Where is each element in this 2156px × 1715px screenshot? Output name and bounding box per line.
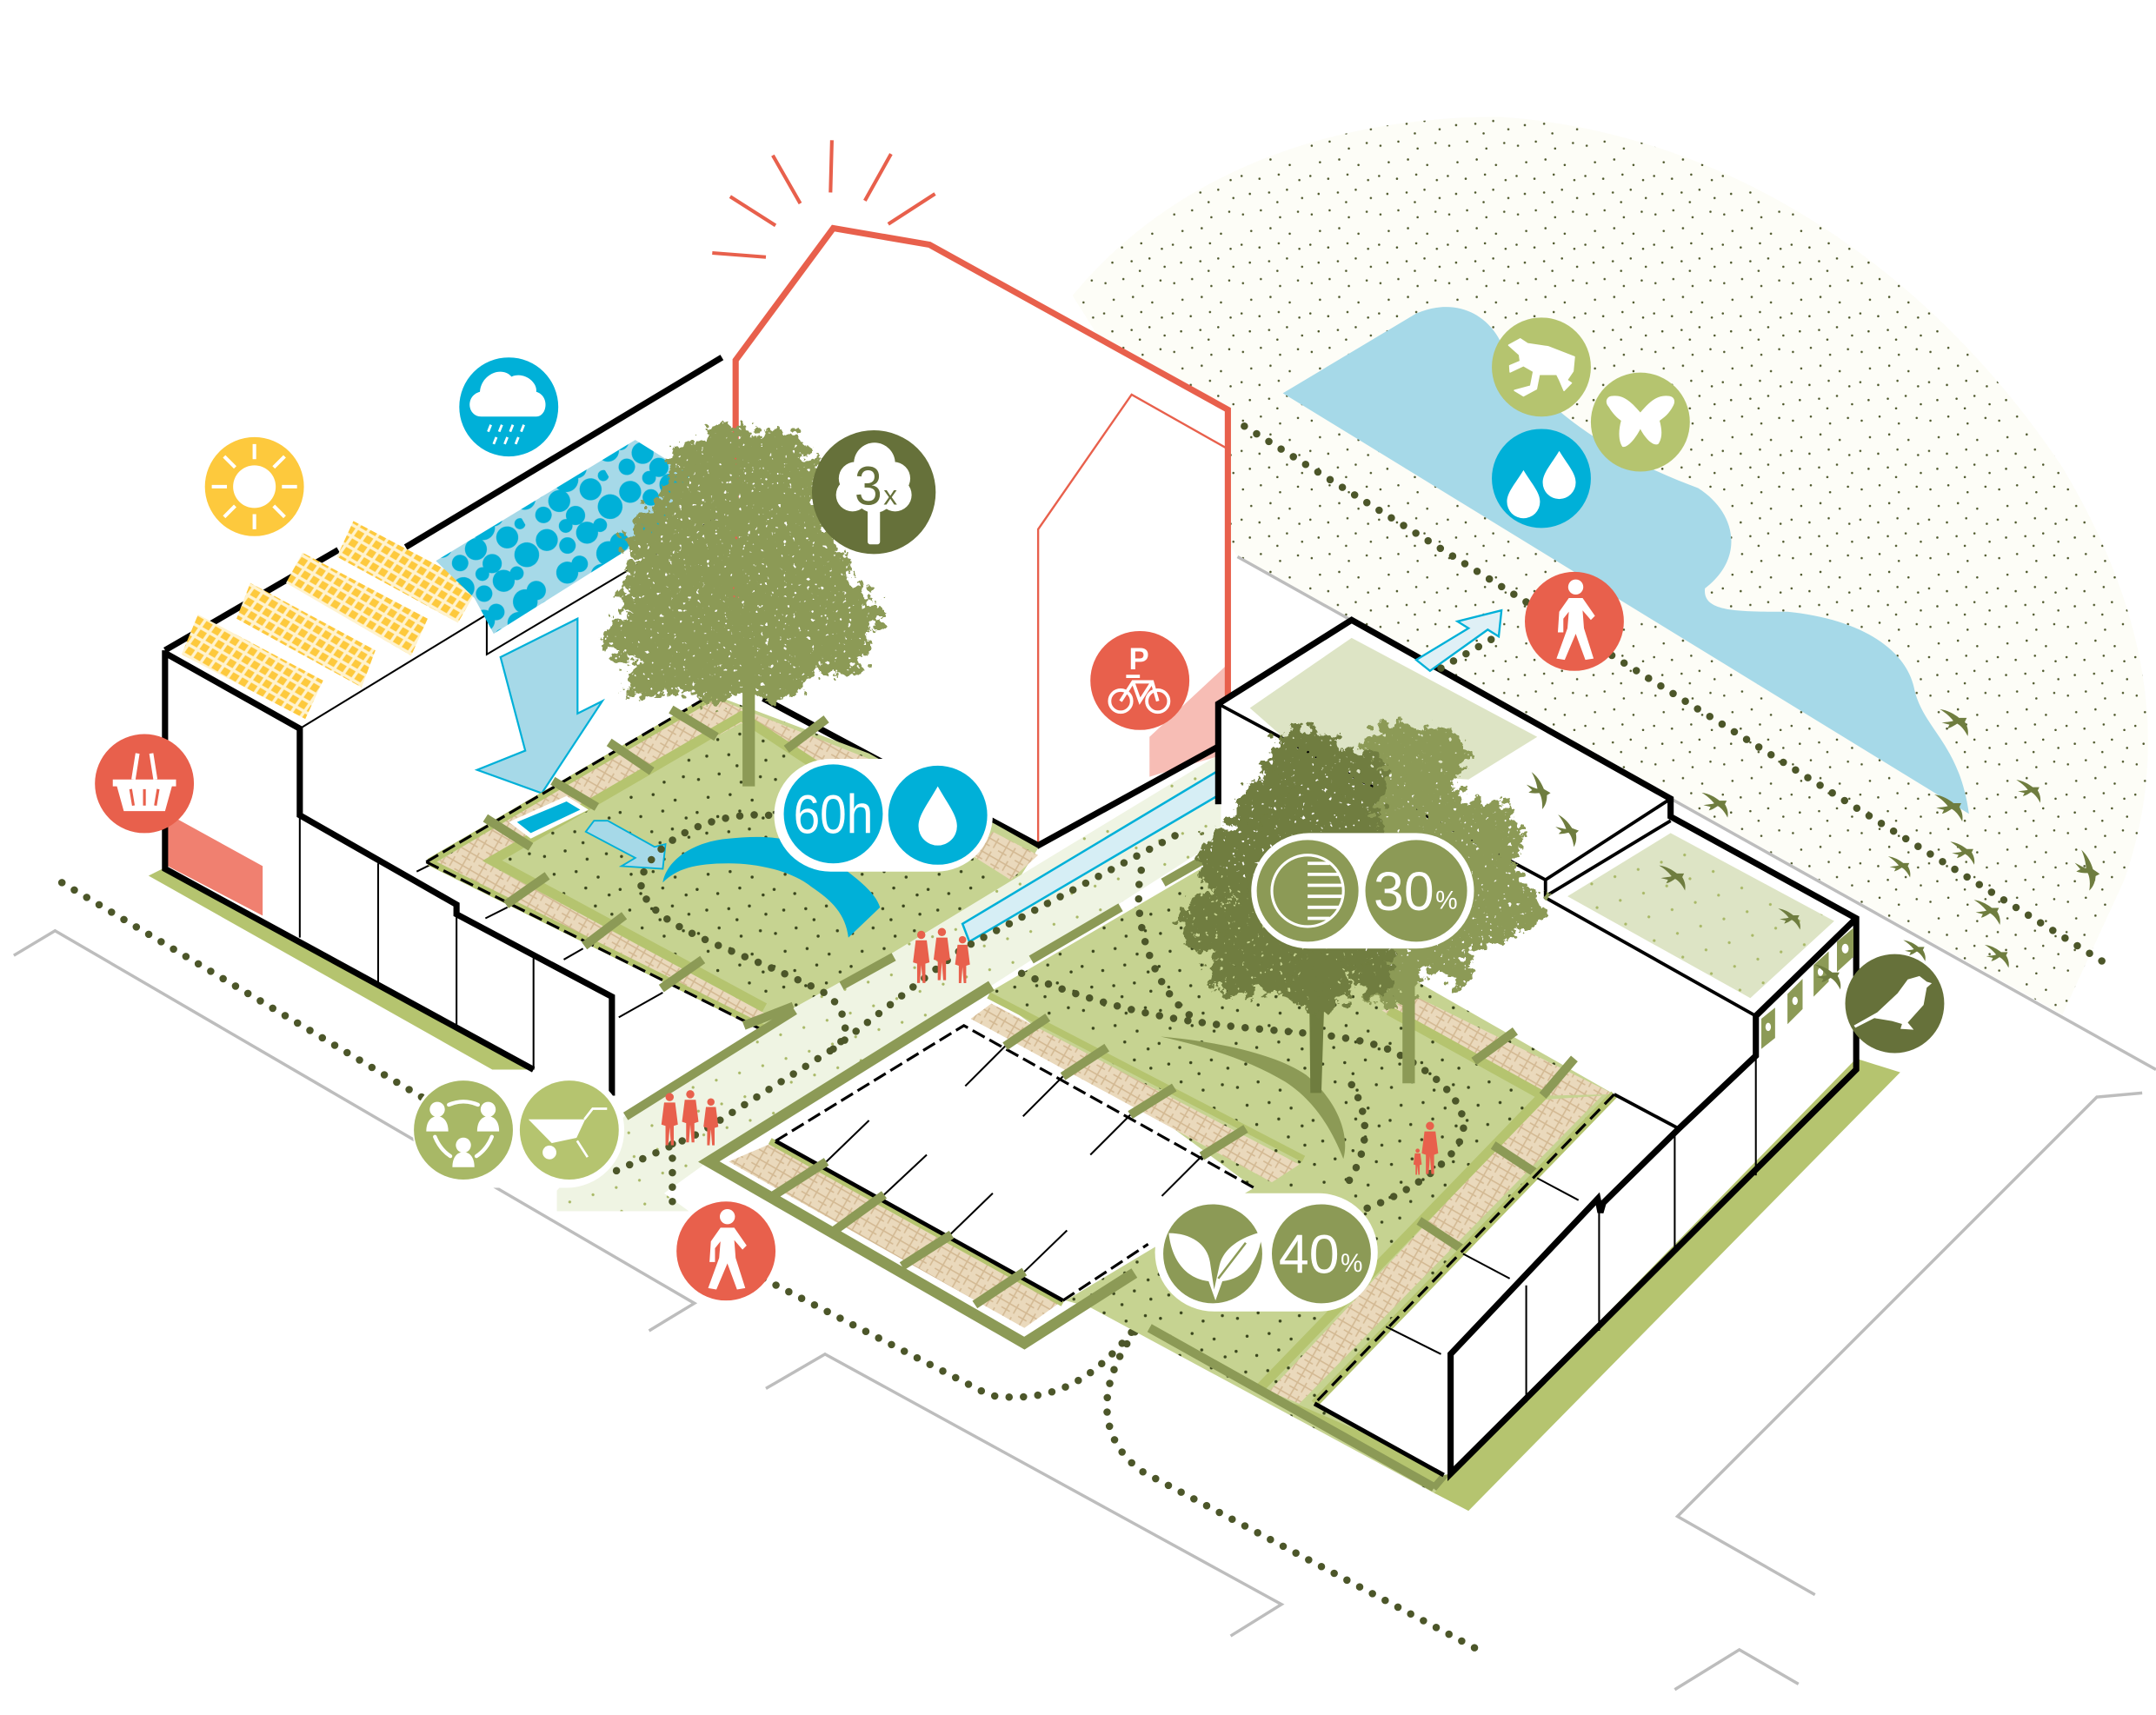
badge: 30% shade: [1251, 833, 1474, 948]
rear tree: [1348, 723, 1546, 1083]
icon: pedestrian south: [676, 1201, 775, 1300]
icon: sun: [205, 437, 304, 536]
nest boxes: [1761, 928, 1853, 1049]
icon: tree 3x: 3: [855, 455, 882, 516]
icon: rain cloud: [459, 357, 558, 456]
street outlines: [14, 557, 2156, 1690]
badge: 30% shade: %: [1435, 886, 1458, 914]
birds: [1518, 709, 2106, 989]
badge: 60h water retention: [774, 759, 993, 872]
icon: shopping basket: [95, 735, 194, 833]
front tree: [1180, 728, 1404, 1093]
badge: 40% greenery: 40: [1279, 1225, 1339, 1286]
leaf shape in planting: [1161, 1036, 1345, 1159]
blue channel along the path: [962, 770, 1220, 941]
pedestrian routes outside the site: [62, 426, 2111, 1650]
small flow arrow: [586, 821, 666, 869]
icon: tree 3x: x: [883, 479, 897, 510]
badge: 60h water retention: 60h: [794, 784, 873, 845]
right building: [1218, 620, 1900, 1511]
icon: pedestrian north: [1525, 572, 1624, 671]
icon: bicycle parking: [1090, 631, 1189, 730]
icon: tree 3x: [812, 430, 935, 554]
badge: 40% greenery: %: [1341, 1249, 1362, 1278]
icon: frog: [1492, 317, 1591, 416]
right courtyard garden: [988, 861, 1614, 1493]
lake: [1283, 307, 1969, 814]
water swoosh: [662, 837, 880, 938]
solar panels: [182, 521, 478, 719]
left courtyard garden: [426, 695, 1038, 1034]
green roof two: [1567, 833, 1834, 998]
people groups: [662, 928, 1438, 1174]
blue water roof: [436, 440, 690, 634]
roof water arrow: [477, 619, 602, 794]
tree beside the red house: [603, 425, 882, 787]
parking court: [709, 986, 1303, 1343]
icon: butterfly: [1591, 373, 1690, 471]
green roof one: [1250, 638, 1537, 780]
left building: [149, 357, 729, 1096]
red outlined planned house: [712, 140, 1228, 848]
badge: 30% shade: 30: [1374, 861, 1434, 922]
arrow beyond the building: [1416, 610, 1501, 671]
badge: 40% greenery: [1155, 1193, 1378, 1312]
icon: bicycle parking: P: [1129, 643, 1149, 676]
icon: water drops: [1492, 429, 1591, 528]
courtyard walking loops: [609, 635, 1499, 1230]
icons: community and wheelbarrow: [413, 1073, 624, 1187]
icon: sparrow: [1846, 954, 1944, 1053]
dotted meadow background: [1073, 116, 2148, 1014]
rain pond: [509, 796, 589, 839]
central path strip: [557, 754, 1221, 1211]
